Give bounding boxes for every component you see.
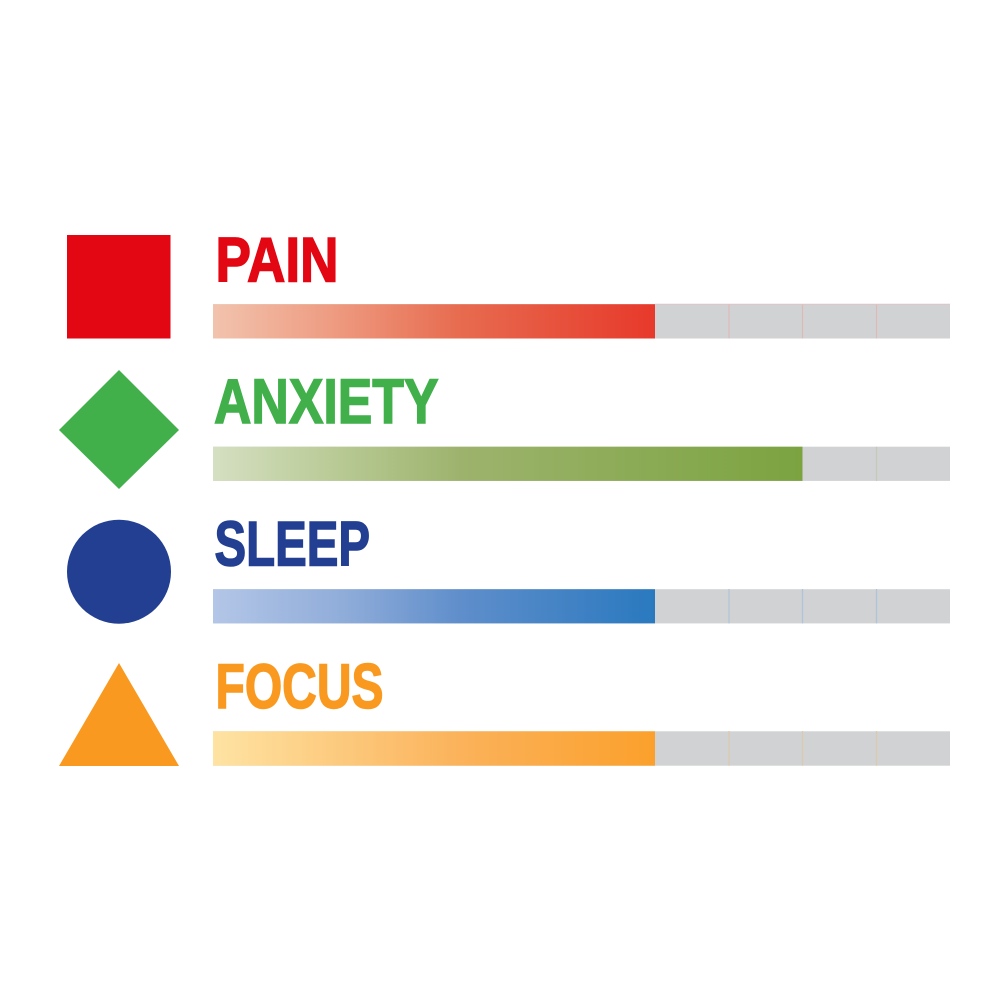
heading: pain: PAIN: [216, 226, 338, 296]
icon: red square: [67, 235, 170, 338]
heading: anxiety: ANXIETY: [214, 367, 438, 437]
row: anxiety: [59, 367, 950, 489]
bar: focus: [213, 731, 950, 766]
icon: blue circle: [67, 520, 171, 624]
row: pain: [67, 226, 950, 338]
row: sleep: [67, 510, 950, 624]
bar: pain: [213, 304, 950, 338]
icon: orange triangle: [59, 663, 179, 766]
bar: anxiety: [213, 447, 950, 481]
bar: sleep: [213, 589, 950, 624]
row: focus: [59, 652, 950, 766]
icon: green diamond: [59, 370, 179, 489]
heading: sleep: SLEEP: [214, 510, 370, 580]
heading: focus: FOCUS: [216, 652, 384, 722]
